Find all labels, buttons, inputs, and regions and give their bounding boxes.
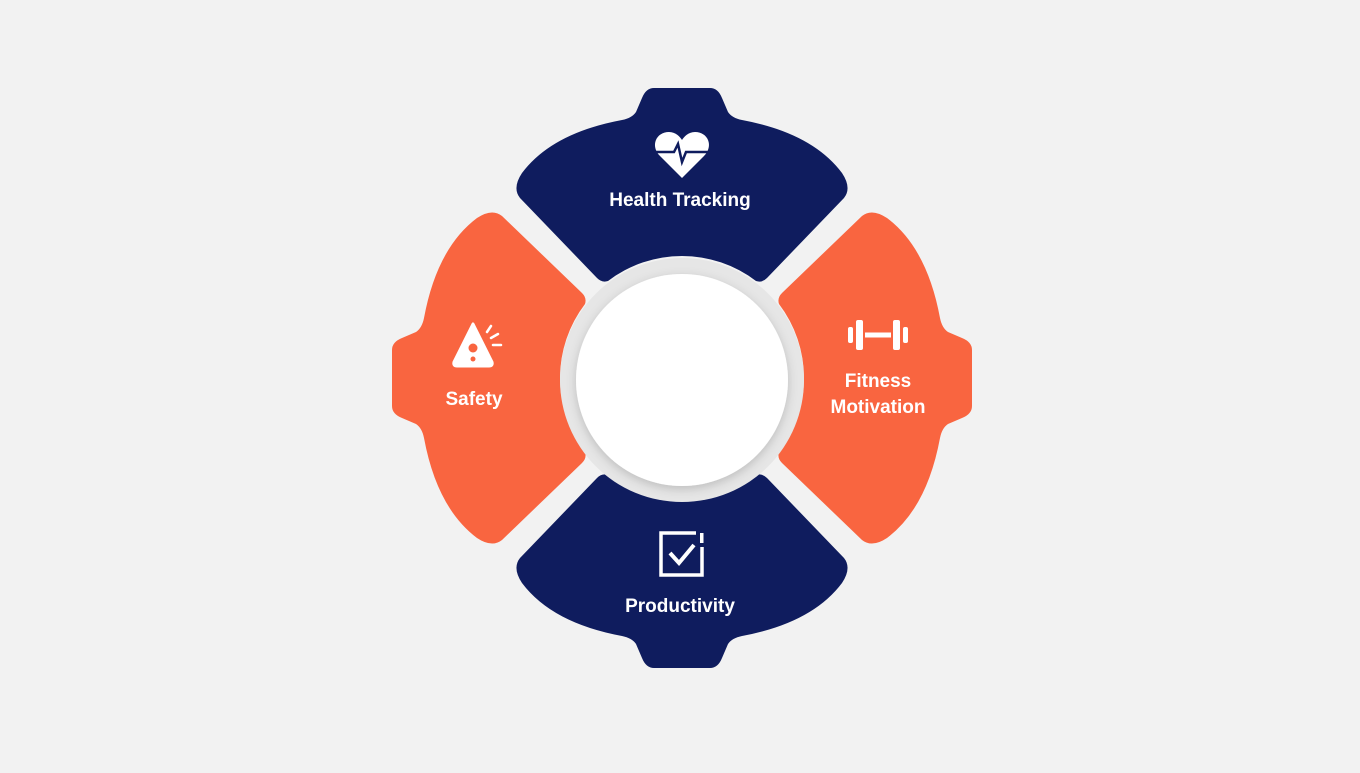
text: productivity: Productivity <box>625 596 735 617</box>
icon: checklist <box>661 533 704 575</box>
segment: health tracking <box>516 88 848 282</box>
text: health tracking: Health Tracking <box>609 190 751 211</box>
text: fitness motivation: Fitness <box>845 371 911 392</box>
icon: dumbbell <box>848 320 908 350</box>
icon: heart <box>655 132 709 178</box>
text: safety: Safety <box>445 389 503 410</box>
segment: fitness motivation <box>778 212 972 544</box>
segment: productivity <box>516 474 848 668</box>
icon: warning <box>454 324 501 366</box>
segment: safety <box>392 212 586 544</box>
center ring <box>560 258 804 502</box>
text: fitness motivation: Motivation <box>830 397 926 418</box>
center circle <box>576 274 788 486</box>
